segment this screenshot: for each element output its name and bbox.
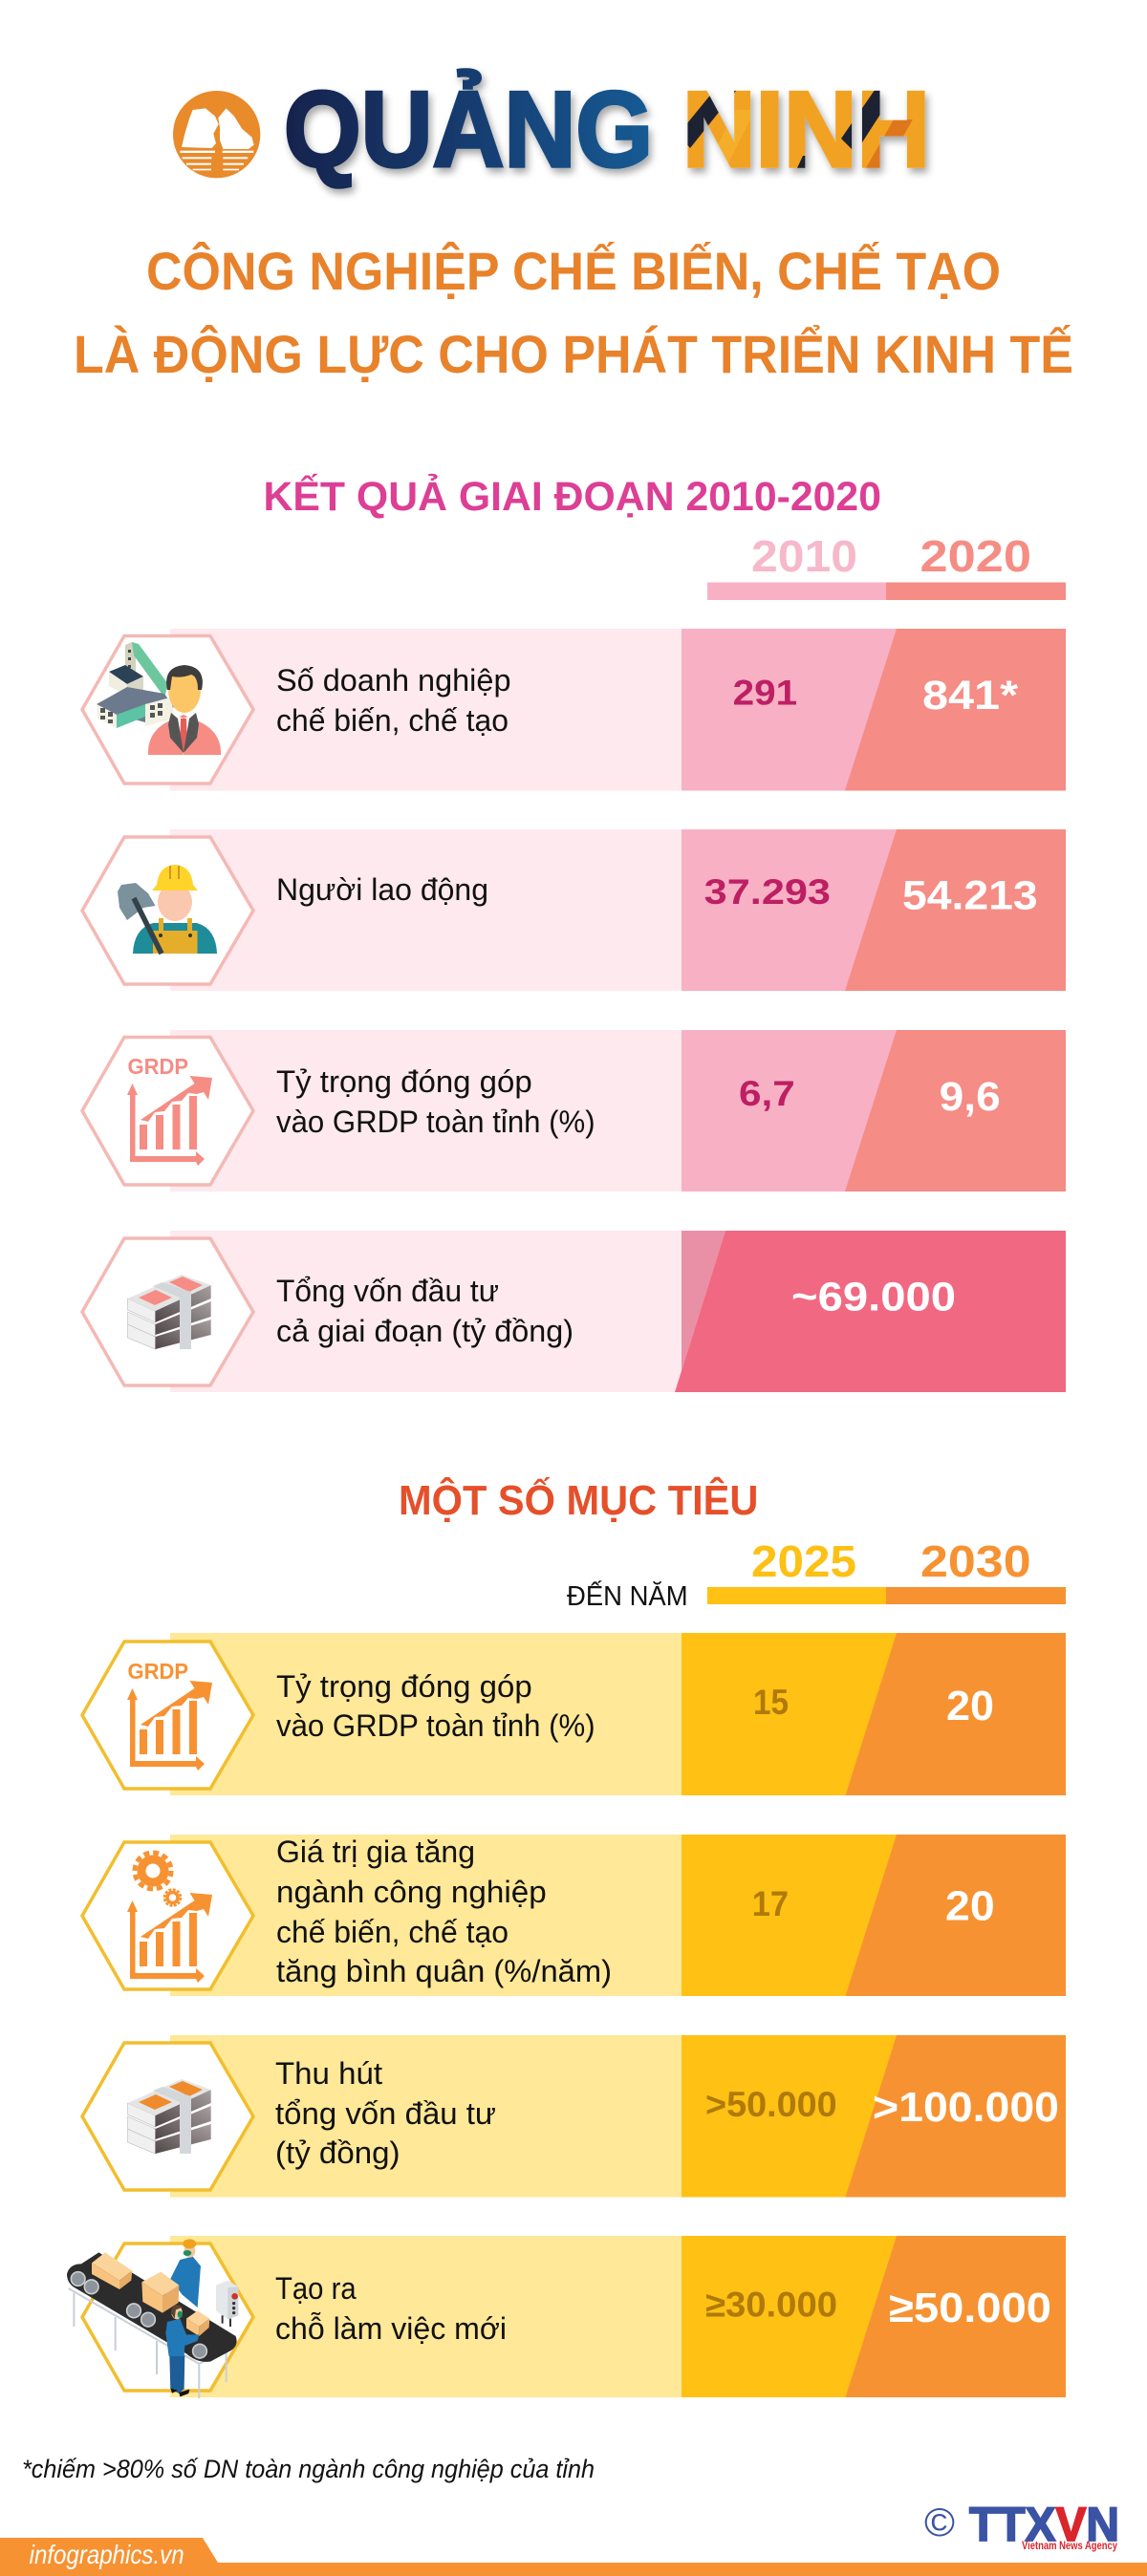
value 2030: 20	[946, 1683, 994, 1729]
subtitle heading: LÀ ĐỘNG LỰC CHO PHÁT TRIỂN KINH TẾ	[74, 324, 1073, 384]
title: Quang Ninh: QUẢNG	[284, 70, 653, 189]
value 2020: 841*	[922, 673, 1018, 719]
logo: Quang Ninh emblem	[173, 91, 260, 178]
value 2025: 15	[753, 1683, 789, 1722]
label fourth line: tăng bình quân (%/năm)	[276, 1954, 612, 1988]
icon: money stack	[128, 2079, 211, 2154]
title: Quang Ninh	[284, 70, 930, 189]
label second line: chế biến, chế tạo	[276, 703, 509, 738]
column header: 2010 and 2020: 2020	[920, 531, 1031, 581]
value 2025: ≥30.000	[705, 2286, 837, 2325]
panel: total investment	[82, 1231, 1066, 1392]
heading: results 2010-2020: KẾT QUẢ GIAI ĐOẠN 2010-2020	[264, 473, 881, 520]
panel: target GRDP share	[82, 1633, 1066, 1795]
icon: worker with shovel	[118, 865, 217, 954]
label second line: chỗ làm việc mới	[275, 2311, 507, 2346]
label: Người lao động	[276, 872, 488, 907]
icon: GRDP chart	[127, 1659, 212, 1771]
icon: GRDP chart: GRDP	[128, 1054, 188, 1079]
icon: money stack	[128, 1275, 211, 1349]
label second line: vào GRDP toàn tỉnh (%)	[276, 1105, 595, 1139]
logo: TTXVN: TTXVN	[969, 2498, 1119, 2551]
value 2030: 20	[945, 1882, 995, 1930]
label: Giá trị gia tăng	[276, 1835, 475, 1869]
icon: GRDP chart	[127, 1054, 212, 1166]
value 2030: >100.000	[873, 2084, 1059, 2131]
label second line: cả giai đoạn (tỷ đồng)	[276, 1314, 574, 1348]
label: Tạo ra	[275, 2271, 357, 2306]
icon: factory and businessman	[97, 642, 221, 755]
panel: number of enterprises	[82, 629, 1066, 791]
value 2025: >50.000	[705, 2085, 837, 2124]
subtitle heading	[74, 241, 1073, 384]
logo: TTXVN: Vietnam News Agency	[1022, 2539, 1117, 2552]
label: Thu hút	[275, 2056, 382, 2091]
value 2030: ≥50.000	[889, 2285, 1051, 2331]
subtitle heading: CÔNG NGHIỆP CHẾ BIẾN, CHẾ TẠO	[146, 241, 1001, 301]
column header: by year 2025 and 2030: 2030	[920, 1536, 1031, 1586]
label: Số doanh nghiệp	[276, 663, 510, 698]
label third line: (tỷ đồng)	[275, 2136, 400, 2170]
icon: GRDP chart: GRDP	[128, 1659, 188, 1684]
logo: TTXVN: ©	[924, 2500, 955, 2544]
panel: GRDP share	[82, 1030, 1066, 1191]
icon: conveyor belt with workers	[67, 2239, 238, 2398]
footer band with site name: infographics.vn	[30, 2540, 184, 2569]
value 2025: 17	[752, 1884, 789, 1923]
label: Tổng vốn đầu tư	[276, 1274, 499, 1308]
label third line: chế biến, chế tạo	[276, 1915, 509, 1949]
column header: by year 2025 and 2030: ĐẾN NĂM	[567, 1579, 688, 1612]
value 2020: 54.213	[902, 873, 1038, 919]
label second line: tổng vốn đầu tư	[275, 2096, 496, 2131]
heading: some targets: MỘT SỐ MỤC TIÊU	[399, 1475, 758, 1524]
footer band with site name	[0, 2538, 1147, 2576]
column header: 2010 and 2020: 2010	[751, 531, 857, 581]
panel: create new jobs	[67, 2236, 1066, 2398]
value total: ~69.000	[791, 1275, 956, 1320]
label second line: ngành công nghiệp	[276, 1875, 547, 1909]
panel: workers	[82, 829, 1066, 991]
value 2010: 6,7	[739, 1074, 795, 1113]
icon: gears and chart	[127, 1853, 212, 1983]
footnote: *chiếm >80% số DN toàn ngành công nghiệp của tỉnh	[22, 2455, 595, 2483]
label second line: vào GRDP toàn tỉnh (%)	[276, 1708, 595, 1743]
panel: added value growth	[82, 1835, 1066, 1996]
title: Quang Ninh: NINH	[682, 70, 930, 189]
column header: by year 2025 and 2030	[567, 1536, 1066, 1612]
panel: attract investment	[82, 2035, 1066, 2198]
column header: 2010 and 2020	[707, 531, 1066, 600]
value 2020: 9,6	[940, 1074, 1001, 1120]
label: Tỷ trọng đóng góp	[276, 1064, 532, 1099]
column header: by year 2025 and 2030: 2025	[751, 1536, 856, 1586]
value 2010: 291	[733, 673, 797, 713]
value 2010: 37.293	[704, 872, 831, 912]
label: Tỷ trọng đóng góp	[276, 1669, 532, 1704]
